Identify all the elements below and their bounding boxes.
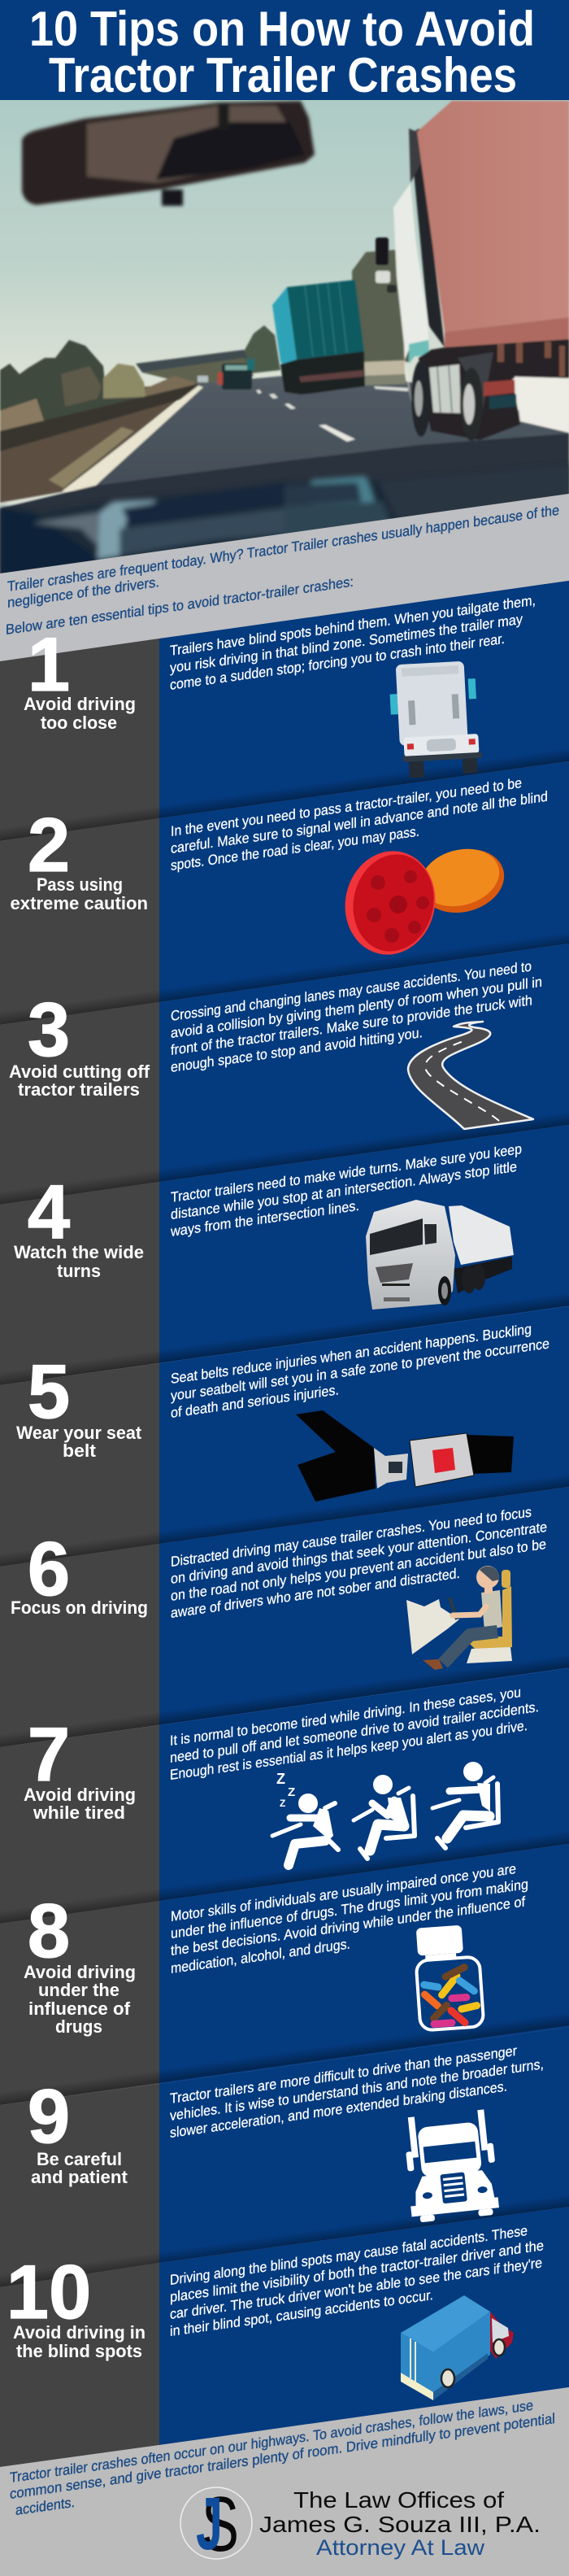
number 5: 5 bbox=[28, 1349, 70, 1434]
text: tip 6: aware of drivers who are not sober and distracted. bbox=[171, 1565, 460, 1621]
icon: pill bottle bbox=[414, 1924, 484, 2031]
heading: avoid driving under the influence of drugs bbox=[24, 1962, 136, 2037]
text: tip 4: Tractor trailers need to make wide turns. Make sure you keep bbox=[171, 1140, 522, 1205]
heading: avoid driving too close: Avoid driving bbox=[24, 694, 136, 714]
text: tip 2: In the event you need to pass a tractor-trailer, you need to be bbox=[171, 774, 522, 839]
heading: avoid driving under the influence of drugs: under the bbox=[38, 1980, 119, 2000]
hero photo: view through windshield bbox=[0, 100, 569, 604]
panel: tip 9 be careful and patient bbox=[0, 2027, 569, 2287]
number 4: 4 bbox=[28, 1169, 70, 1254]
title banner bbox=[0, 0, 569, 102]
rear view mirror bbox=[22, 101, 315, 206]
icon: sleepy driver: Z bbox=[288, 1785, 295, 1799]
panel: tip 10 avoid driving in the blind spots bbox=[0, 2207, 569, 2467]
number 6: 6 bbox=[28, 1526, 70, 1611]
text: tip 4: ways from the intersection lines. bbox=[170, 1197, 359, 1240]
panel: tip 2 pass using extreme caution bbox=[0, 761, 569, 1025]
number 2: 2 bbox=[28, 802, 70, 887]
text: tip 10: car driver. The truck driver won't be able to see the cars if they're bbox=[170, 2255, 542, 2322]
text: tip 10: places limit the visibility of both the tractor-trailer driver and the bbox=[170, 2237, 544, 2305]
icon: sleepy driver: Z bbox=[276, 1771, 285, 1787]
heading: watch the wide turns: Watch the wide bbox=[14, 1242, 144, 1262]
text: tip 2: careful. Make sure to signal well in advance and note all the blind bbox=[171, 788, 548, 856]
text: tip 7: Enough rest is essential as it helps keep you alert as you drive. bbox=[170, 1717, 528, 1783]
icon: orange and red tail lights bbox=[336, 840, 511, 963]
heading: wear your seat belt bbox=[16, 1423, 141, 1461]
heading: be careful and patient bbox=[31, 2149, 128, 2187]
text: tip 3: front of the tractor trailers. Make sure to provide the truck with bbox=[171, 992, 532, 1058]
logo: JS monogram: S bbox=[202, 2481, 239, 2568]
text: tip 6: Distracted driving may cause trailer crashes. You need to focus bbox=[171, 1503, 532, 1570]
heading: avoid driving too close: too close bbox=[41, 713, 117, 733]
text: tip 5: Seat belts reduce injuries when an accident happens. Buckling bbox=[171, 1320, 532, 1387]
footer band bbox=[0, 2387, 569, 2576]
logo: JS monogram bbox=[180, 2481, 252, 2568]
panel: tip 3 avoid cutting off tractor trailers bbox=[0, 944, 569, 1205]
heading: avoid cutting off tractor trailers bbox=[9, 1061, 150, 1100]
closing text: Tractor trailer crashes often occur on our highways. To avoid crashes, follow the laws, use bbox=[10, 2397, 533, 2486]
panel: tip 8 avoid driving under the influence of drugs bbox=[0, 1844, 569, 2105]
heading: focus on driving: Focus on driving bbox=[11, 1597, 148, 1618]
text: tip 7 bbox=[170, 1681, 539, 1783]
text: tip 8: Motor skills of individuals are usually impaired once you are bbox=[171, 1860, 516, 1924]
icon: middle driver bbox=[354, 1775, 415, 1859]
text: tip 7: It is normal to become tired while driving. In these cases, you bbox=[170, 1684, 521, 1749]
text: tip 1 bbox=[170, 592, 536, 693]
icon: seat belt buckle bbox=[296, 1410, 514, 1502]
text: tip 2 bbox=[171, 771, 548, 874]
heading: avoid driving under the influence of drugs: drugs bbox=[55, 2016, 102, 2037]
text: tip 3 bbox=[171, 957, 542, 1075]
text: tip 8 bbox=[171, 1859, 528, 1977]
icon: front of semi truck bbox=[402, 2109, 501, 2223]
text: tip 9: slower acceleration, and more extended braking distances. bbox=[170, 2077, 507, 2141]
number 7: 7 bbox=[28, 1711, 70, 1797]
text: tip 1: Trailers have blind spots behind them. When you tailgate them, bbox=[170, 592, 536, 659]
text: tip 9: vehicles. It is wise to understand this and note the broader turns, bbox=[170, 2055, 544, 2124]
closing text: common sense, and give tractor trailers plenty of room. Drive mindfully to prevent potential bbox=[10, 2410, 555, 2502]
number 8: 8 bbox=[28, 1888, 70, 1973]
heading: avoid driving while tired: while tired bbox=[33, 1802, 125, 1823]
intro text: negligence of the drivers. bbox=[7, 573, 159, 611]
panel: tip 6 focus on driving bbox=[0, 1487, 569, 1747]
text: tip 4: distance while you stop at an intersection. Always stop little bbox=[171, 1158, 517, 1223]
heading: avoid driving while tired: Avoid driving bbox=[24, 1785, 136, 1805]
heading: avoid driving under the influence of drugs: Avoid driving bbox=[24, 1962, 136, 1982]
firm name: The Law Offices of bbox=[293, 2487, 504, 2513]
text: tip 6: on the road not only helps you prevent an accident but also to be bbox=[171, 1536, 546, 1604]
title banner: Tractor Trailer Crashes bbox=[49, 48, 517, 102]
text: tip 8: medication, alcohol, and drugs. bbox=[171, 1935, 350, 1977]
text: tip 8: the best decisions. Avoid driving while under the influence of bbox=[171, 1894, 525, 1959]
text: tip 2: spots. Once the road is clear, you may pass. bbox=[171, 823, 419, 874]
text: tip 5: of death and serious injuries. bbox=[171, 1381, 339, 1421]
icon: isometric blue truck bbox=[401, 2295, 514, 2400]
text: tip 1: you risk driving in that blind zone. Sometimes the trailer may bbox=[170, 611, 523, 676]
heading: avoid driving in the blind spots: Avoid driving in bbox=[13, 2322, 146, 2343]
text: tip 3: Crossing and changing lanes may cause accidents. You need to bbox=[171, 957, 532, 1024]
panel: tip 5 wear your seat belt bbox=[0, 1306, 569, 1567]
heading: be careful and patient: and patient bbox=[31, 2167, 128, 2187]
text: tip 3: avoid a collision by giving them plenty of room when you pull in bbox=[171, 974, 542, 1041]
closing text: accidents. bbox=[15, 2494, 75, 2518]
icon: sleepy driver bbox=[272, 1771, 338, 1865]
number 9: 9 bbox=[28, 2073, 70, 2159]
text: tip 6: on driving and avoid things that seek your attention. Concentrate bbox=[171, 1519, 547, 1587]
heading: pass using extreme caution bbox=[10, 874, 148, 913]
firm name: Attorney At Law bbox=[316, 2535, 485, 2560]
text: tip 6 bbox=[171, 1502, 547, 1621]
heading: avoid driving in the blind spots: the blind spots bbox=[16, 2341, 142, 2361]
text: tip 5 bbox=[171, 1318, 549, 1421]
panel: tip 1 avoid driving too close bbox=[0, 581, 569, 841]
text: tip 10: Driving along the blind spots may cause fatal accidents. These bbox=[170, 2222, 528, 2288]
heading: wear your seat belt: Wear your seat bbox=[16, 1423, 141, 1443]
heading: avoid cutting off tractor trailers: Avoid cutting off bbox=[9, 1061, 150, 1082]
text: tip 10 bbox=[170, 2220, 544, 2339]
heading: avoid driving under the influence of drugs: influence of bbox=[28, 1998, 130, 2019]
heading: watch the wide turns bbox=[14, 1242, 144, 1281]
text: tip 9: Tractor trailers are more difficult to drive than the passenger bbox=[170, 2042, 517, 2107]
heading: watch the wide turns: turns bbox=[57, 1261, 101, 1281]
icon: right driver bbox=[432, 1762, 498, 1848]
panel: tip 7 avoid driving while tired bbox=[0, 1668, 569, 1924]
icon: winding road bbox=[408, 1022, 533, 1129]
icon: rear of van bbox=[389, 660, 483, 778]
heading: avoid driving while tired bbox=[24, 1785, 136, 1823]
heading: avoid driving in the blind spots bbox=[13, 2322, 146, 2361]
icon: three drivers with sleeping symbols bbox=[272, 1762, 498, 1865]
heading: pass using extreme caution: Pass using bbox=[37, 874, 123, 895]
text: tip 9 bbox=[170, 2038, 544, 2141]
firm name bbox=[259, 2487, 541, 2560]
heading: be careful and patient: Be careful bbox=[37, 2149, 122, 2169]
intro text bbox=[6, 502, 559, 638]
text: tip 7: need to pull off and let someone drive to avoid trailer accidents. bbox=[170, 1698, 539, 1766]
heading: avoid driving too close bbox=[24, 694, 136, 733]
logo: JS monogram: J bbox=[196, 2482, 223, 2565]
text: tip 4 bbox=[170, 1140, 522, 1240]
text: tip 10: in their blind spot, causing accidents to occur. bbox=[170, 2286, 433, 2339]
firm name: James G. Souza III, P.A. bbox=[259, 2512, 541, 2537]
text: tip 1: come to a sudden stop; forcing you to crash into their rear. bbox=[170, 630, 505, 693]
icon: driver in seat bbox=[406, 1566, 512, 1670]
panel: tip 4 watch the wide turns bbox=[0, 1125, 569, 1385]
number 10: 10 bbox=[7, 2249, 91, 2334]
heading: pass using extreme caution: extreme caution bbox=[10, 893, 148, 913]
text: tip 8: under the influence of drugs. The drugs limit you from making bbox=[171, 1876, 528, 1942]
text: tip 3: enough space to stop and avoid hitting you. bbox=[171, 1024, 423, 1075]
icon: white semi truck bbox=[366, 1200, 514, 1310]
heading: wear your seat belt: belt bbox=[63, 1441, 97, 1461]
intro band bbox=[0, 494, 569, 661]
intro text: Below are ten essential tips to avoid tractor-trailer crashes: bbox=[6, 573, 354, 638]
icon: sleepy driver: Z bbox=[280, 1798, 285, 1809]
number 3: 3 bbox=[28, 987, 70, 1072]
heading: avoid cutting off tractor trailers: tractor trailers bbox=[18, 1079, 140, 1100]
number 1: 1 bbox=[28, 621, 70, 707]
